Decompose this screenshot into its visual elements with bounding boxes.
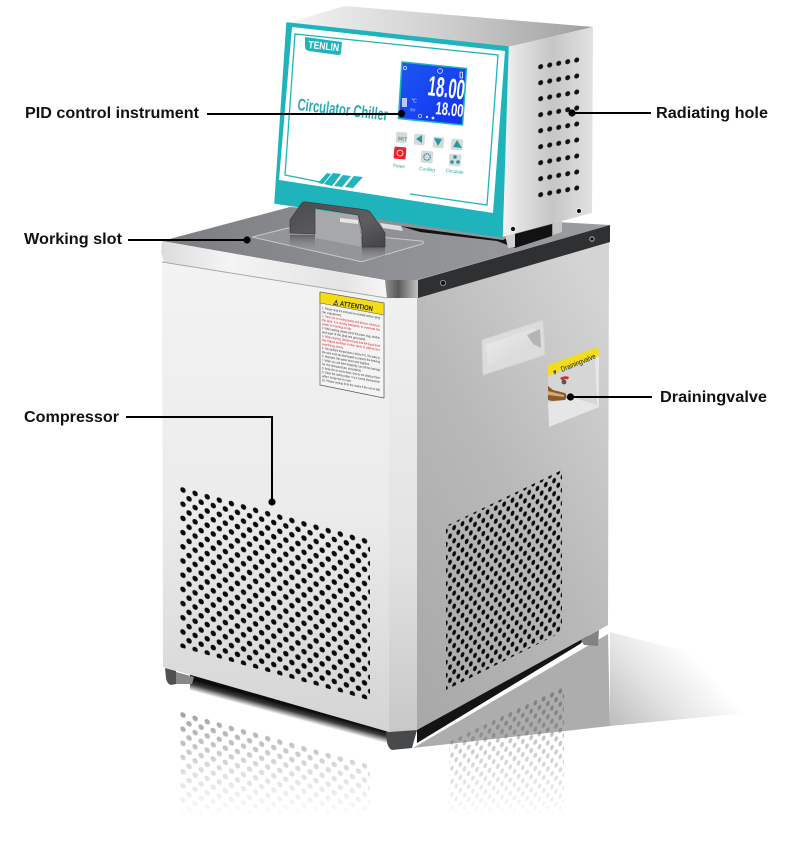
foot: corner [386, 730, 417, 750]
radiating holes [538, 57, 580, 198]
chrome front strip [161, 241, 387, 298]
callout: Drainingvalve: Drainingvalve [660, 389, 767, 406]
lid surface [162, 207, 610, 280]
cooling key [420, 150, 434, 164]
decorative stripes [318, 173, 363, 188]
callout: Working slot [24, 231, 251, 248]
set reading: 18.00 [435, 98, 465, 121]
side face [417, 240, 609, 730]
reflection: side perforation [449, 688, 564, 806]
LCD display [398, 62, 467, 125]
niche back wall [548, 358, 597, 405]
callout: Compressor [24, 409, 276, 506]
corner strip [389, 296, 417, 732]
sticker instructions: the tank. It is strictly forbidden to overheat the [322, 318, 380, 332]
sticker instructions: 2. There are no cooling blades and devices. Heating in [322, 314, 380, 328]
sticker instructions: water in cooling mode. [322, 322, 352, 331]
drain valve niche [548, 347, 599, 427]
attention sticker: ⚠ ATTENTION [333, 299, 373, 313]
foot: left [165, 668, 194, 685]
callout: Radiating hole: Radiating hole [656, 105, 768, 122]
lid panel [252, 228, 424, 262]
power key [393, 146, 407, 160]
key captions: Circulate [445, 168, 464, 176]
brand badge: TENLIN [308, 39, 340, 54]
SET key: SET [397, 136, 408, 143]
sticker instructions: 3. When starting, please check the power plug, whether [322, 326, 381, 340]
product name: Circulator Chiller [297, 95, 389, 125]
circulate key [448, 153, 462, 167]
callout: Radiating hole [568, 105, 768, 122]
sticker instructions: after long-term use. [322, 374, 352, 383]
sticker instructions: 8. Keep the air vents clean, and do not obstruct them [322, 366, 380, 380]
sticker instructions: 6. Maintain the water level and hygiene. [322, 354, 370, 366]
sticker instructions: the equipment. [322, 310, 342, 317]
front white panel [279, 27, 505, 213]
side perforation [446, 470, 562, 690]
LCD display: SV [410, 107, 416, 113]
box top [287, 6, 593, 47]
callout: Working slot: Working slot [24, 231, 122, 248]
hinge glint right [380, 223, 403, 231]
control box feet [505, 219, 562, 248]
foot reflection left [290, 235, 315, 252]
sticker instructions: 4. When starting, please ensure that the liquid level [322, 334, 380, 348]
inset teal line [285, 34, 498, 205]
dark side edge [418, 225, 610, 298]
keypad [393, 132, 464, 176]
shadow under control box [400, 224, 552, 248]
foot reflection right [362, 247, 385, 262]
callout: PID control instrument: PID control instrument [25, 105, 199, 122]
sticker instructions [322, 306, 381, 392]
sticker instructions: the tank must be discharged to prevent the freezing [322, 350, 380, 364]
attention sticker [320, 292, 384, 398]
sticker instructions: working area. [322, 342, 344, 350]
valve handle [560, 376, 569, 384]
sticker instructions: 7. When you use them frequently, turn off the drainage [322, 358, 380, 372]
edge screws [440, 280, 446, 286]
control box [275, 6, 593, 237]
niche floor [548, 398, 597, 424]
sticker instructions: 1. Please read the instructions carefully before using [322, 306, 380, 320]
niche frame [548, 356, 599, 427]
small indicators: ℃ [411, 98, 417, 105]
under-body shadow [190, 672, 389, 745]
key captions [393, 163, 464, 176]
callout: PID control instrument [25, 105, 405, 122]
sticker instructions: 5. The ambient temperature is below 5°C, the water in [322, 346, 380, 360]
callout: Compressor: Compressor [24, 409, 119, 426]
chrome corner [385, 280, 418, 298]
floor shadow [413, 632, 758, 748]
key captions: Power [393, 163, 406, 170]
hinge glint [340, 218, 358, 224]
callout: Drainingvalve [567, 389, 767, 406]
foot: right [581, 630, 599, 646]
chiller base unit [162, 240, 609, 750]
knob block [315, 208, 362, 247]
sticker instructions: the liquid surface in the tank is above the [322, 338, 380, 352]
sticker instructions: for the temperature circulation. [322, 362, 362, 373]
down key [432, 137, 444, 149]
yellow label: Drainingvalve [559, 352, 597, 374]
side carry handle [482, 320, 545, 375]
main reading: 18.00 [426, 70, 467, 105]
left key [413, 134, 425, 146]
side screws [510, 226, 516, 232]
key captions: Cooling [419, 166, 436, 174]
side under-body shadow [417, 634, 590, 743]
brass pipe [548, 386, 566, 401]
lid carrying handle [290, 202, 403, 262]
front face [162, 260, 389, 732]
top lid [161, 207, 610, 298]
sticker instructions: 9. Clean the cooling water. It is a normal phenomenon [322, 370, 380, 384]
front teal shell [275, 23, 508, 237]
teal gap line [315, 208, 358, 216]
front perforation [180, 487, 370, 700]
sticker instructions: 10. Please unplug from the mains if the unit is idle [322, 378, 380, 392]
handle body [290, 202, 385, 247]
reflection: front perforation [180, 712, 370, 806]
box side [502, 27, 593, 237]
sticker instructions: and type of the plug are grounded. [322, 330, 366, 342]
up key [450, 138, 463, 151]
